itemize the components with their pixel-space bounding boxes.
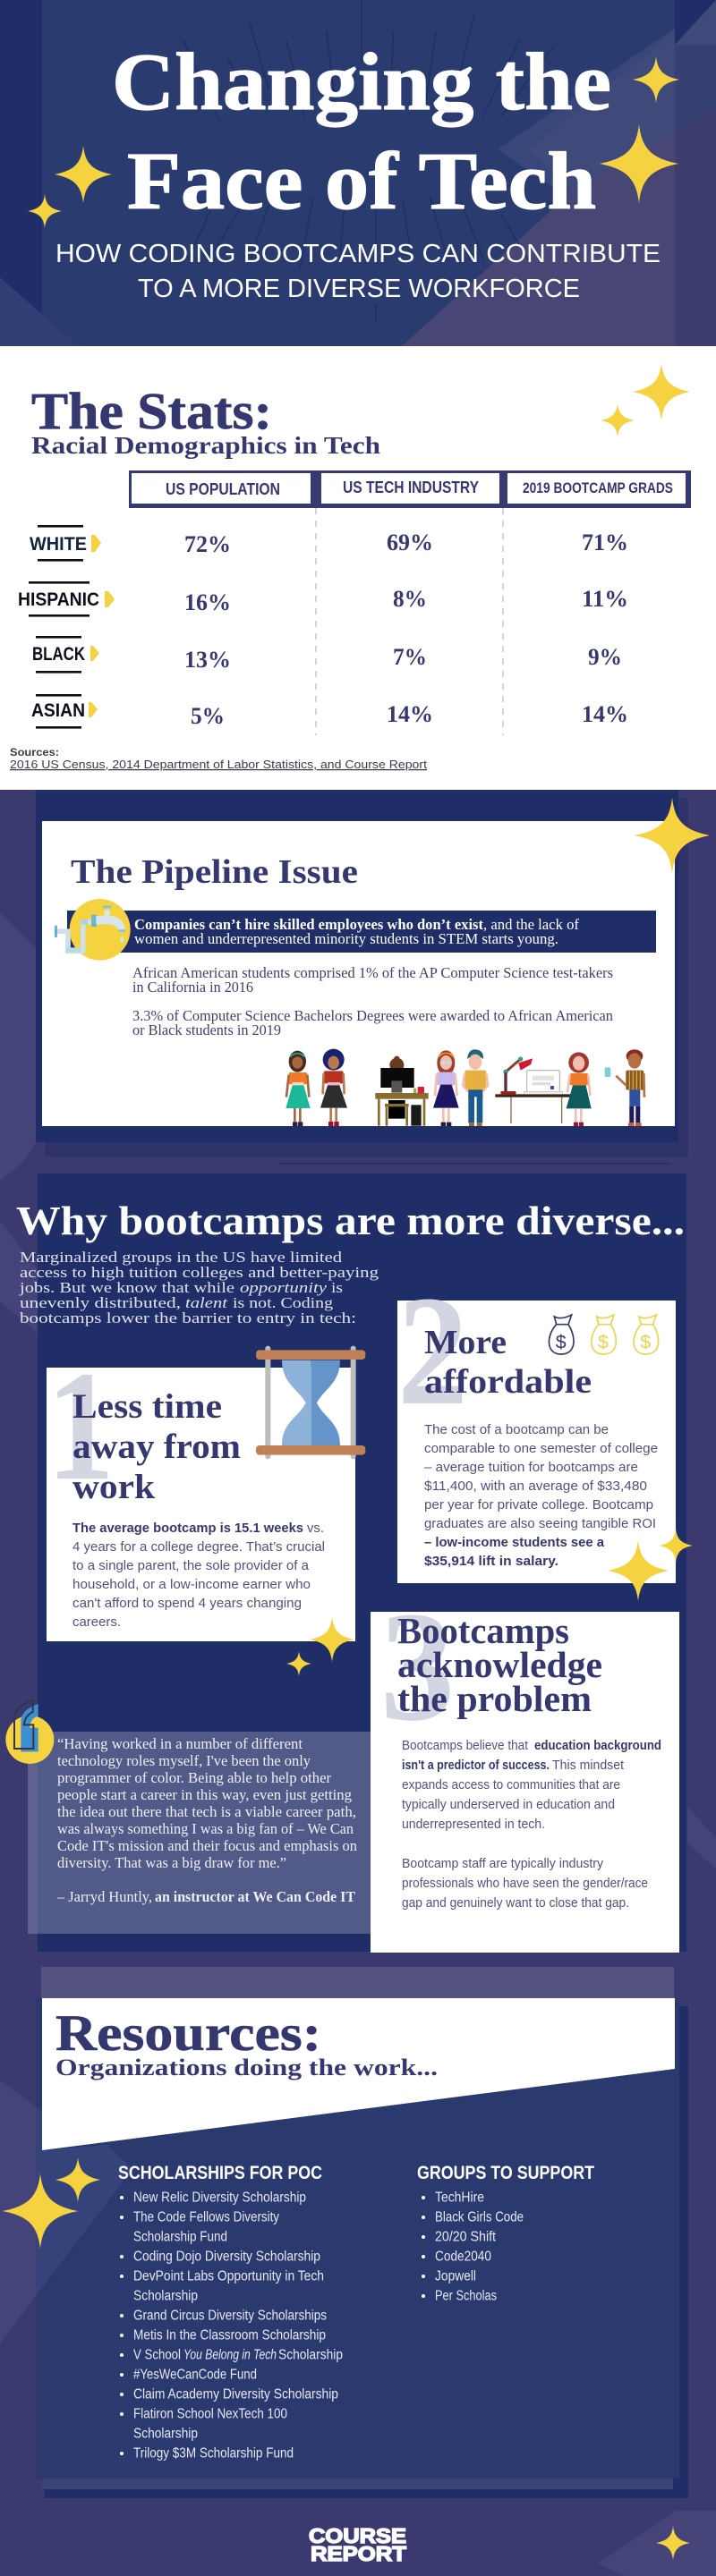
panel: why bootcamps are more diverse [5,1174,693,1953]
table values: 8% [393,586,427,612]
text block: intro: is not. Coding [233,1294,334,1311]
logo: course report: REPORT [311,2542,407,2565]
logo: course report: COURSE [309,2524,406,2547]
header banner [0,0,716,346]
logo: course report [309,2524,407,2565]
list: scholarships for poc: Metis In the Classroom Scholarship [133,2327,326,2343]
text block: acknowledge details [402,1738,661,1911]
text block: intro: bootcamps lower the barrier to entry in tech: [20,1309,356,1326]
icon: card 1 stars [286,1617,354,1676]
title: Changing the [112,37,611,127]
list: groups to support: Jopwell [435,2268,476,2284]
list: groups to support [417,2163,594,2304]
list: groups to support: Per Scholas [435,2288,497,2304]
table header: US POPULATION [166,480,280,498]
text block: affordable details: – average tuition for bootcamps are [424,1460,638,1475]
row label: black [32,636,99,674]
list: groups to support: Code2040 [435,2249,491,2265]
icon: resources stars [3,2157,100,2249]
text block: pipeline stats: or Black students in 2019 [132,1021,281,1038]
list: scholarships for poc: Flatiron School NexTech 100 [133,2406,287,2422]
text block: pipeline stats [132,964,613,1038]
text block: less time details: careers. [72,1614,121,1630]
row label: white [30,525,101,562]
text block: less time details [72,1521,325,1630]
text block: quote: people start a career in this way, even just getting [57,1786,352,1803]
text block: quote: “Having worked in a number of different [57,1735,303,1752]
heading: pipeline issue: The Pipeline Issue [71,853,358,891]
text block: acknowledge details: isn't a predictor of success. [402,1758,550,1773]
text block: affordable details [424,1422,658,1569]
icon: quote mark [5,1699,54,1764]
table values: 5% [191,703,225,729]
text block: affordable details: per year for private college. Bootcamp [424,1497,653,1513]
row label: white: WHITE [30,534,87,555]
text block: less time details: to a single parent, the sole provider of a [72,1558,310,1573]
list: scholarships for poc: DevPoint Labs Opportunity in Tech [133,2268,324,2284]
number 1: 1 [47,1339,115,1513]
text block: pipeline stats: 3.3% of Computer Science Bachelors Degrees were awarded to African American [132,1007,613,1024]
callout bar: Companies can’t hire skilled employees who don’t exist [134,916,484,933]
text block: acknowledge details: expands access to communities that are [402,1777,620,1792]
text block: less time details: household, or a low-income earner who [72,1577,311,1592]
list: groups to support: 20/20 Shift [435,2229,497,2245]
card 3: bootcamps acknowledge the problem [371,1580,679,1953]
table values: 16% [184,589,231,615]
subheading: racial demographics: Racial Demographics in Tech [31,432,380,459]
table values: 71% [582,530,628,555]
row label: hispanic [18,581,115,617]
list: scholarships for poc [118,2163,343,2462]
icon: stats stars [601,363,690,437]
text block: less time details: can't afford to spend 4 years changing [72,1596,302,1611]
text block: pipeline stats: African American students comprised 1% of the AP Computer Science test-takers [132,964,613,981]
subtitle: TO A MORE DIVERSE WORKFORCE [138,275,580,303]
text block: intro: access to high tuition colleges and better-paying [20,1264,379,1281]
table header [129,470,691,508]
text block: less time details: The average bootcamp is 15.1 weeks [72,1521,303,1536]
table values: 13% [184,647,231,673]
text block: quote: technology roles myself, I've been the only [57,1752,311,1769]
sources [10,746,428,771]
list: scholarships for poc: Trilogy $3M Scholarship Fund [133,2445,294,2462]
text block: intro: jobs. But we know that while [19,1279,234,1296]
list: scholarships for poc: Grand Circus Diversity Scholarships [133,2308,327,2324]
heading: less time: away from [72,1428,241,1466]
row label: asian: ASIAN [31,700,85,721]
text block: acknowledge details: education background [534,1738,661,1753]
title: Face of Tech [127,136,596,226]
quote panel [5,1699,371,1934]
subtitle [55,240,661,303]
sources: 2016 US Census, 2014 Department of Labor Statistics, and Course Report [10,758,428,771]
text block: quote: diversity. That was a big draw for me.” [57,1854,286,1871]
icon: money bags: $ [556,1331,567,1352]
text block: affordable details: The cost of a bootcamp can be [424,1422,609,1437]
heading: why bootcamps: Why bootcamps are more diverse... [16,1198,685,1243]
table values: 14% [582,701,628,727]
heading: acknowledge [397,1610,602,1719]
row label: black: BLACK [32,644,85,665]
number 3: 3 [380,1580,455,1754]
panel: the stats [0,346,716,790]
callout bar: , and the lack of [483,916,579,933]
list: scholarships for poc: You Belong in Tech [183,2347,277,2363]
heading: acknowledge: the problem [397,1678,592,1719]
table values [184,530,628,729]
text block: quote [56,1735,357,1905]
sources: Sources: [10,746,59,758]
text block: acknowledge details: Bootcamp staff are typically industry [402,1856,603,1871]
heading: the stats: The Stats: [31,382,272,440]
heading: more affordable [424,1324,592,1401]
list: scholarships for poc: Scholarship [133,2426,198,2442]
heading: less time: Less time [72,1387,222,1426]
icon: header stars [28,56,679,228]
illustration: people and desks [286,1049,644,1126]
card 1: less time away from work [47,1339,365,1676]
table values: 14% [387,701,433,727]
text block: affordable details: $35,914 lift in salary. [424,1554,558,1569]
row label: asian [31,694,98,729]
list: groups to support: TechHire [435,2190,484,2206]
callout bar [67,911,656,953]
text block: quote: an instructor at We Can Code IT [155,1888,355,1905]
list: scholarships for poc: Scholarship [278,2347,343,2363]
icon: pipeline star [635,798,710,873]
text block: quote: Code IT's mission and their focus and emphasis on [57,1837,357,1854]
text block: less time details: vs. [307,1521,324,1536]
table values: 7% [393,644,427,670]
text block: pipeline stats: in California in 2016 [132,979,253,996]
table header: US TECH INDUSTRY [343,479,479,496]
text block: affordable details: $11,400, with an average of $33,480 [424,1479,647,1494]
number 2: 2 [397,1264,468,1438]
list: groups to support: Black Girls Code [435,2209,524,2225]
text block: affordable details: – low-income students see a [424,1535,605,1550]
table values: 72% [184,531,231,557]
text block: affordable details: graduates are also seeing tangible ROI [424,1516,656,1531]
heading: less time: work [72,1468,155,1506]
callout bar: women and underrepresented minority students in STEM starts young. [134,930,558,947]
text block: quote: programmer of color. Being able to help other [57,1769,332,1786]
icon: footer star [656,2526,690,2560]
subtitle: HOW CODING BOOTCAMPS CAN CONTRIBUTE [55,240,661,268]
row label: hispanic: HISPANIC [18,589,99,610]
table header: 2019 BOOTCAMP GRADS [523,480,673,496]
icon: money bags: $ [598,1331,609,1352]
list: scholarships for poc: New Relic Diversity Scholarship [133,2190,306,2206]
list: scholarships for poc: SCHOLARSHIPS FOR POC [118,2163,322,2183]
text block: acknowledge details: Bootcamps believe that [402,1738,529,1753]
icon: card 2 stars [608,1529,693,1601]
table values: 11% [582,586,628,612]
icon: hourglass [256,1346,365,1459]
text block: acknowledge details: gap and genuinely want to close that gap. [402,1895,629,1911]
text block: acknowledge details: professionals who have seen the gender/race [402,1876,648,1891]
heading: acknowledge: acknowledge [397,1644,602,1685]
heading: less time [72,1387,241,1506]
panel: the pipeline issue [36,790,710,1157]
heading: more affordable: More [424,1324,507,1361]
icon: money bags [549,1315,659,1354]
list: scholarships for poc: V School [133,2347,181,2363]
heading: resources: Resources: [55,2005,321,2062]
text block: quote: – Jarryd Huntly, [56,1888,152,1905]
table values: 9% [588,644,622,670]
panel: resources [0,1967,688,2498]
text block: acknowledge details: underrepresented in tech. [402,1817,545,1832]
heading: more affordable: affordable [424,1363,592,1401]
card 2: more affordable [397,1264,693,1601]
text block: intro: talent [185,1294,229,1311]
text block: intro: opportunity [240,1279,328,1296]
list: scholarships for poc: The Code Fellows Diversity [133,2209,279,2225]
text block: affordable details: comparable to one semester of college [424,1441,658,1456]
list: scholarships for poc: Coding Dojo Diversity Scholarship [133,2249,320,2265]
title [112,37,611,226]
text block: acknowledge details: typically underserved in education and [402,1797,615,1812]
subheading: organizations: Organizations doing the work... [55,2055,438,2080]
icon: faucet [55,899,131,961]
white heading banner [42,1998,675,2150]
text block: intro: unevenly distributed, [20,1294,181,1311]
list: scholarships for poc: Scholarship [133,2288,198,2304]
list: scholarships for poc: #YesWeCanCode Fund [133,2367,257,2383]
text block: quote: was always something I was a big fan of – We Can [57,1820,354,1837]
text block: less time details: 4 years for a college degree. That’s crucial [72,1539,325,1555]
text block: intro: Marginalized groups in the US have limited [20,1249,343,1266]
text block: acknowledge details: This mindset [552,1758,625,1773]
text block: intro: is [331,1279,343,1296]
list: groups to support: GROUPS TO SUPPORT [417,2163,594,2183]
text block: intro [19,1249,379,1326]
text block: quote: the idea out there that tech is a viable career path, [57,1803,356,1820]
list: scholarships for poc: Scholarship Fund [133,2229,227,2245]
heading: acknowledge: Bootcamps [397,1610,569,1651]
table values: 69% [387,530,433,555]
list: scholarships for poc: Claim Academy Diversity Scholarship [133,2386,338,2402]
icon: money bags: $ [640,1331,651,1352]
